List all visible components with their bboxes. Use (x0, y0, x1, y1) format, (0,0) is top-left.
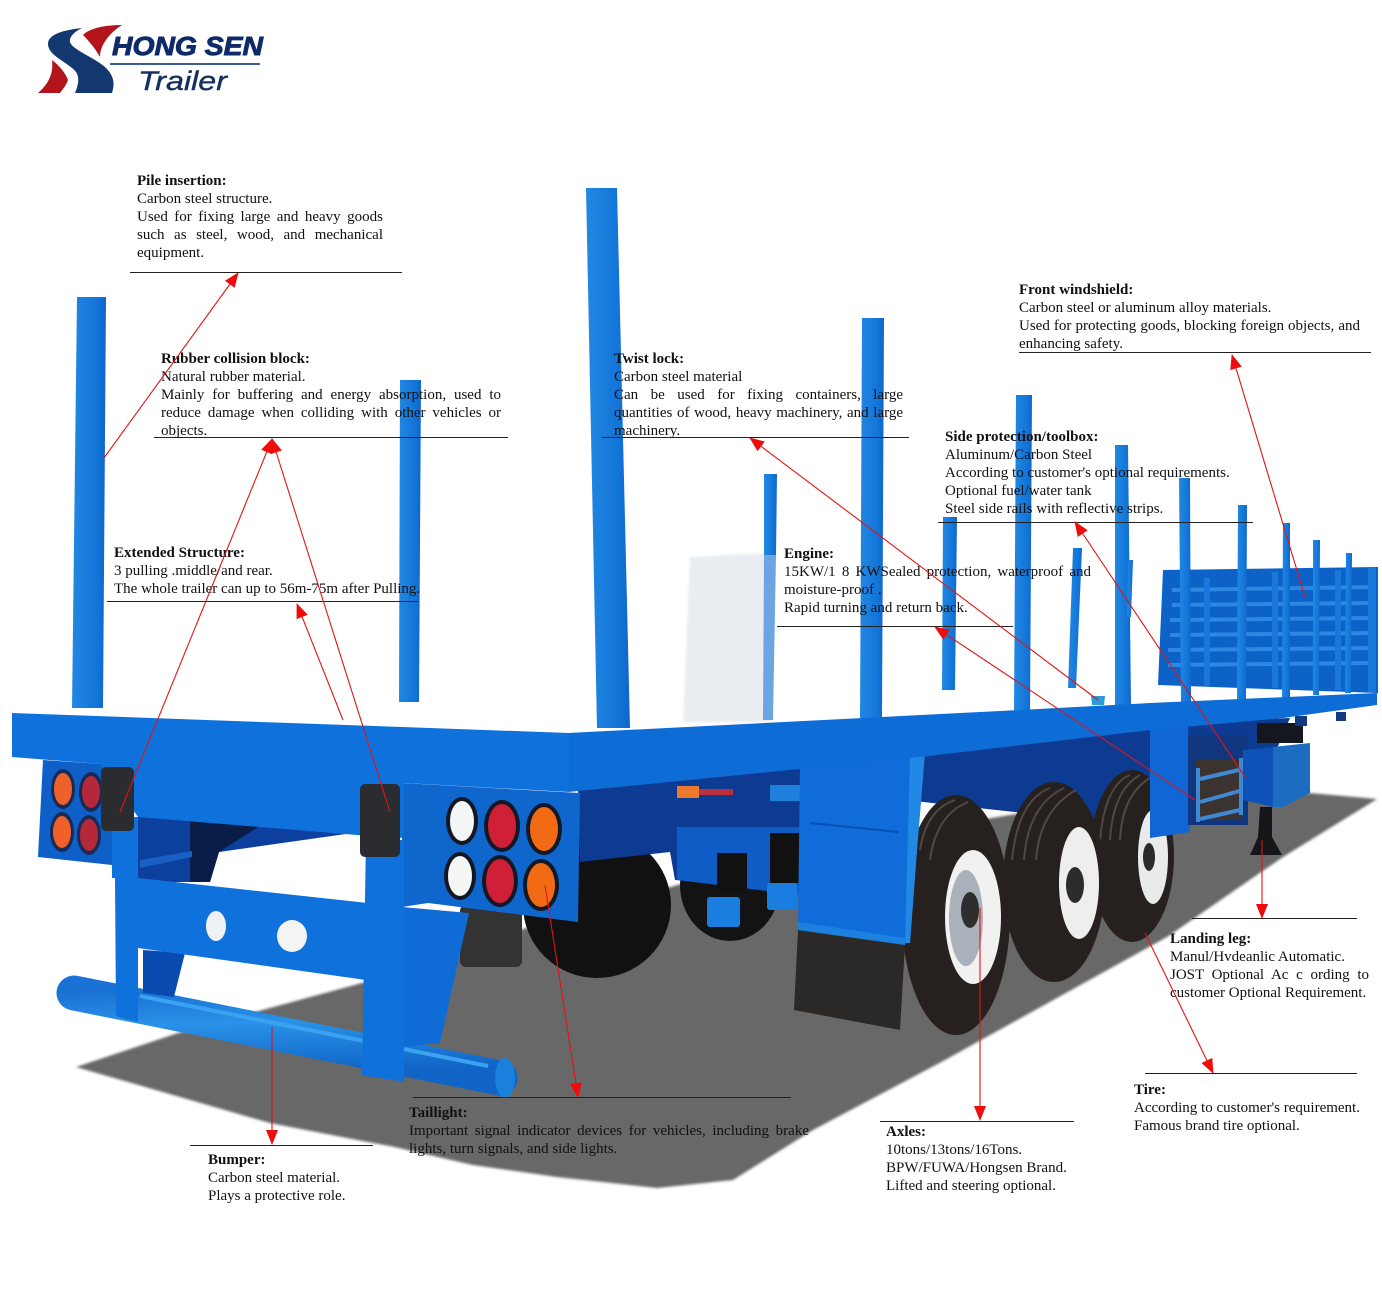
callout: axles (886, 1124, 1067, 1194)
wheel 2 (1003, 782, 1105, 982)
logo: HONG SEN (112, 31, 264, 61)
callout: side protection: Steel side rails with reflective strips. (945, 501, 1163, 517)
callout: twist lock: Carbon steel material (614, 369, 742, 385)
arrow: engine (935, 627, 1195, 800)
callout: taillight: lights, turn signals, and side lights. (409, 1141, 617, 1157)
callout: bumper: Bumper: (208, 1152, 266, 1168)
logo: Trailer (138, 66, 228, 96)
callout: rubber collision block: reduce damage when colliding with other vehicles or (161, 405, 501, 421)
side deck rail (568, 693, 1377, 792)
arrow: landing leg (1261, 840, 1263, 918)
callout: front windshield: Front windshield: (1019, 282, 1133, 298)
mudflap (794, 930, 905, 1030)
callout: front windshield (1019, 282, 1360, 352)
callout: rubber collision block: Mainly for buffering and energy absorption, used to (161, 387, 501, 403)
callout: extended structure: 3 pulling .middle/and rear. (114, 563, 273, 579)
arrow: rubber block left (120, 439, 272, 812)
callout: axles: Axles: (886, 1124, 926, 1140)
callout: pile insertion (137, 173, 383, 261)
callout: tire: According to customer's requirement. (1134, 1100, 1360, 1116)
callout: pile insertion: equipment. (137, 245, 204, 261)
callout: landing leg: Landing leg: (1170, 931, 1251, 947)
arrow: pile insertion (104, 273, 238, 458)
callout: engine: moisture-proof . (784, 582, 881, 598)
rear underside (138, 815, 360, 882)
callout: extended structure: Extended Structure: (114, 545, 245, 561)
callout: extended structure (114, 545, 420, 597)
callout: taillight: Taillight: (409, 1105, 468, 1121)
callout: taillight: Important signal indicator devices for vehicles, including brake (409, 1123, 809, 1139)
callout: front windshield: enhancing safety. (1019, 336, 1123, 352)
suspension (677, 785, 806, 927)
arrow: front windshield (1232, 355, 1305, 597)
landing leg (1250, 807, 1282, 855)
callout: pile insertion: Pile insertion: (137, 173, 227, 189)
callout: engine: Rapid turning and return back. (784, 600, 968, 616)
callout: bumper: Plays a protective role. (208, 1188, 345, 1204)
twist lock fitting (1091, 696, 1105, 705)
callout: pile insertion: such as steel, wood, and mechanical (137, 227, 383, 243)
callout: axles: Lifted and steering optional. (886, 1178, 1056, 1194)
callout: rubber collision block (161, 351, 501, 439)
callout: twist lock: machinery. (614, 423, 680, 439)
callout: twist lock: quantities of wood, heavy machinery, and large (614, 405, 903, 421)
side panel, toolbox and ladder (1150, 712, 1346, 838)
callout: side protection: Side protection/toolbox: (945, 429, 1098, 445)
rear frame (112, 817, 469, 1082)
callout: front windshield: Carbon steel or aluminum alloy materials. (1019, 300, 1271, 316)
callout: bumper: Carbon steel material. (208, 1170, 340, 1186)
callout: rubber collision block: objects. (161, 423, 207, 439)
callout: tire: Tire: (1134, 1082, 1166, 1098)
arrow: bumper (271, 1027, 273, 1144)
callout: axles: BPW/FUWA/Hongsen Brand. (886, 1160, 1067, 1176)
callout: tire (1134, 1082, 1360, 1134)
logo (38, 25, 264, 96)
cargo block (683, 553, 770, 722)
rear dual wheels (460, 829, 780, 978)
callout: twist lock (614, 351, 903, 439)
headboard (1158, 567, 1378, 693)
washed lower stake (763, 555, 776, 720)
bumper tube (74, 993, 515, 1098)
callout: extended structure: The whole trailer can up to 56m-75m after Pulling. (114, 581, 420, 597)
arrow: extended structure (297, 604, 343, 720)
callout: side protection (945, 429, 1230, 517)
arrow: tire (1145, 933, 1213, 1073)
callout: twist lock: Can be used for fixing containers, large (614, 387, 903, 403)
callout: landing leg (1170, 931, 1369, 1001)
callout: landing leg: customer Optional Requirement. (1170, 985, 1366, 1001)
callout: tire: Famous brand tire optional. (1134, 1118, 1300, 1134)
left light panel (38, 760, 115, 865)
callout: bumper (208, 1152, 345, 1204)
right light panel (402, 783, 580, 922)
callout: engine (784, 546, 1091, 616)
callout: landing leg: JOST Optional Ac c ording to (1170, 967, 1369, 983)
callout: pile insertion: Carbon steel structure. (137, 191, 272, 207)
callout: front windshield: Used for protecting goods, blocking foreign objects, and (1019, 318, 1360, 334)
fender (798, 752, 925, 945)
callout: taillight (409, 1105, 809, 1157)
callout: landing leg: Manul/Hvdeanlic Automatic. (1170, 949, 1345, 965)
callout: side protection: Optional fuel/water tank (945, 483, 1092, 499)
wheel 1 (902, 795, 1010, 1035)
stakes (72, 188, 1352, 728)
callout: engine: Engine: (784, 546, 834, 562)
ground shadow (76, 793, 1377, 1188)
callout: pile insertion: Used for fixing large and heavy goods (137, 209, 383, 225)
arrow: rubber block right (272, 439, 390, 812)
deck rear beam (12, 713, 569, 838)
arrow: taillight (545, 885, 578, 1097)
callout: twist lock: Twist lock: (614, 351, 684, 367)
side marker lamp (677, 786, 733, 798)
arrow: twist lock (750, 438, 1098, 700)
callout: engine: 15KW/1 8 KWSealed protection, waterproof and (784, 564, 1091, 580)
callout: side protection: Aluminum/Carbon Steel (945, 447, 1092, 463)
callout: rubber collision block: Natural rubber material. (161, 369, 306, 385)
callout: side protection: According to customer's optional requirements. (945, 465, 1230, 481)
callout: rubber collision block: Rubber collision block: (161, 351, 310, 367)
rubber collision blocks (101, 767, 400, 857)
arrow: side protection (1075, 522, 1245, 777)
arrow: axles (979, 908, 981, 1120)
callout: axles: 10tons/13tons/16Tons. (886, 1142, 1022, 1158)
under-deck frame (578, 718, 1290, 890)
wheel 3 (1090, 770, 1174, 942)
